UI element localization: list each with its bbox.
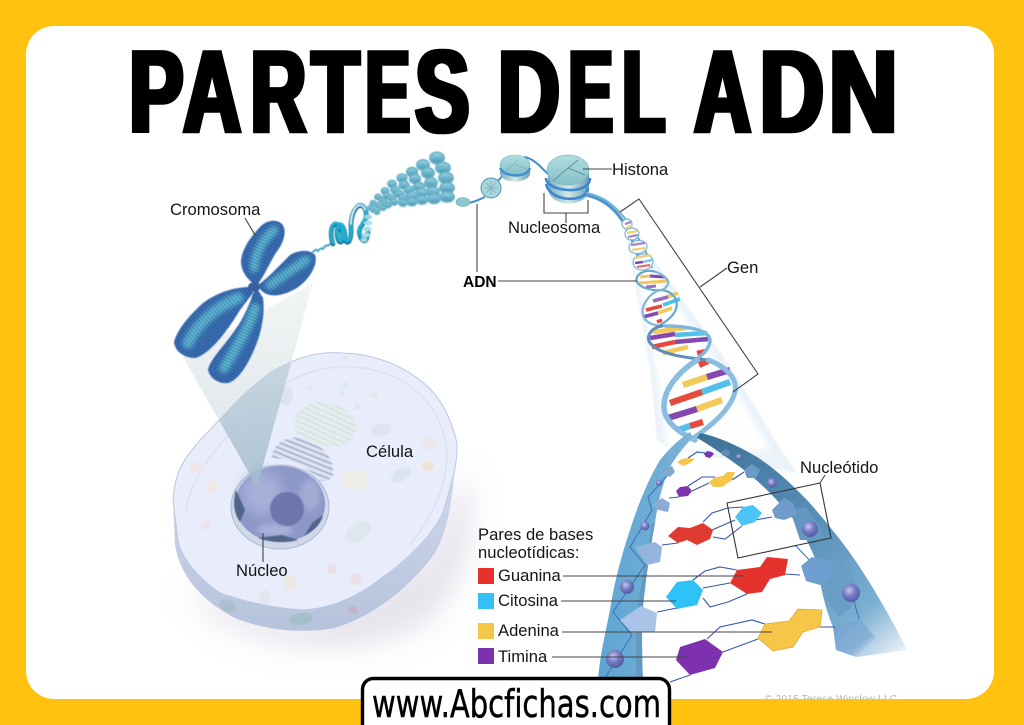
magnifying cone over cell (219, 362, 291, 486)
title: E (366, 26, 410, 157)
endoplasmic reticulum (272, 438, 333, 482)
Guanina swatch (478, 568, 494, 584)
label: Cromosoma: Cromosoma (170, 200, 261, 219)
title: P (129, 26, 183, 157)
legend: Guanina (498, 566, 562, 585)
website badge: www.Abcfichas.com (372, 682, 661, 725)
helix cone glow (622, 215, 797, 473)
title: A (183, 26, 241, 157)
lower left arm (174, 287, 253, 358)
label: Núcleo: Núcleo (236, 561, 288, 580)
cell shadow (185, 470, 471, 648)
title: S (415, 26, 469, 157)
Timina swatch (478, 648, 494, 664)
centromere (248, 282, 260, 292)
helix strands (636, 271, 735, 440)
DNA between nucleosomes (456, 155, 552, 206)
tiny nucleosome (456, 198, 470, 206)
legend: Adenina (498, 621, 560, 640)
label: Nucleótido: Nucleótido (800, 458, 878, 477)
magnifying cone behind chromosome (183, 283, 313, 487)
right arm (258, 251, 316, 295)
lobe 4 rungs (668, 361, 730, 430)
label: ADN: ADN (463, 274, 497, 291)
legend heading: Pares de bases (478, 525, 593, 544)
hydrogen bond lines (657, 452, 835, 682)
Adenina swatch (478, 623, 494, 639)
label: Histona: Histona (612, 160, 669, 179)
small disc nucleosome (481, 178, 501, 198)
nucleotide box (727, 483, 831, 558)
large DNA ladder (598, 432, 907, 682)
upper arm (241, 221, 285, 284)
cell side wall (173, 443, 457, 631)
lower right arm (208, 290, 264, 383)
small rungs top (625, 222, 652, 267)
title: A (694, 26, 751, 157)
leader lines (245, 169, 825, 657)
legend: Timina (498, 647, 548, 666)
inner rim (186, 367, 447, 545)
nucleolus (270, 492, 304, 526)
nucleus (234, 466, 325, 542)
title: E (569, 26, 613, 157)
label: Nucleosoma: Nucleosoma (508, 218, 601, 237)
spheres (606, 454, 860, 668)
chromatin fibre fan (360, 152, 454, 242)
lobe 3 rungs (650, 328, 708, 353)
title (129, 26, 898, 157)
legend (478, 525, 593, 666)
chromosome (174, 221, 316, 383)
left ribbon (598, 432, 693, 680)
title: T (312, 26, 359, 157)
cell top surface (173, 353, 457, 610)
medium nucleosome (500, 155, 530, 182)
gene helix (586, 193, 797, 473)
golgi (295, 402, 356, 447)
Citosina swatch (478, 593, 494, 609)
title: L (622, 26, 665, 157)
right ribbon (697, 433, 907, 657)
legend: nucleotídicas: (478, 543, 579, 562)
small lobes top (622, 219, 654, 272)
darker inner band on left ribbon (636, 523, 655, 680)
bases (666, 451, 822, 675)
organelles (190, 355, 436, 627)
title: R (251, 26, 306, 157)
title: N (829, 26, 898, 157)
nucleus envelope (231, 465, 329, 549)
histone nucleosome (546, 155, 590, 204)
pentagon sugars (620, 449, 876, 657)
copyright: © 2015 Terese Winslow LLC (765, 694, 897, 705)
strand from nucleosome (586, 195, 640, 262)
title: D (760, 26, 824, 157)
lobe 2 rungs (643, 293, 680, 322)
illustration: cell (172, 352, 458, 631)
legend: Citosina (498, 591, 559, 610)
backbone lines (605, 475, 860, 678)
label: Gen: Gen (727, 258, 758, 277)
title: D (498, 26, 560, 157)
lobe 1 rungs (639, 276, 667, 287)
label: Célula: Célula (366, 442, 414, 461)
chromatin squiggle (313, 204, 368, 252)
